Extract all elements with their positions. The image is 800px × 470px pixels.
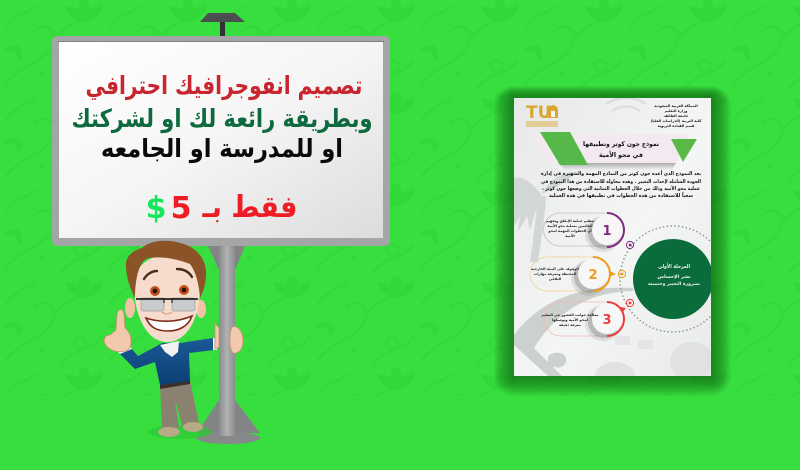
left cuff xyxy=(118,346,132,354)
header institution text: كلية التربية (الدراسات العليا) xyxy=(651,119,702,123)
eyebrows xyxy=(144,269,192,279)
step 3: معالجة جوانب القصور في التعليم xyxy=(541,313,599,317)
step 3: 3 xyxy=(602,313,612,328)
trousers xyxy=(160,381,199,428)
sweeping curve xyxy=(514,288,633,376)
price text: فقط بـ xyxy=(202,190,298,225)
shirt collar xyxy=(160,341,179,357)
price number: 5 xyxy=(171,191,191,226)
watermark music note xyxy=(548,352,566,368)
dollar sign: $ xyxy=(146,191,166,226)
palm silhouette xyxy=(514,172,575,262)
watermark flowchart xyxy=(615,336,653,349)
ears xyxy=(125,298,206,318)
header institution text: قسم القيادة التربوية xyxy=(658,124,695,128)
step 1: الأمية xyxy=(565,233,575,238)
stage circle xyxy=(633,239,713,319)
step 3: معرفة دقيقة xyxy=(559,323,581,327)
step 1: تنظيم عملية الإنفاق وتفهيم xyxy=(546,219,595,223)
intro paragraph: سعياً للاستفادة من هذه الخطوات في تطبيقها في هذه العملية xyxy=(549,191,693,199)
step 2: 2 xyxy=(588,268,598,283)
nose xyxy=(162,312,172,314)
step 1: 1 xyxy=(602,224,612,239)
title banner: نموذج جون كوتر وتطبيقها xyxy=(583,140,659,148)
eyes xyxy=(150,285,189,296)
stage circle: المرحلة الأولى xyxy=(658,262,690,270)
billboard xyxy=(52,36,390,246)
step 2: المحيطة ومعرفة مهارات xyxy=(534,272,576,276)
wifi watermark xyxy=(606,98,646,111)
TU logo xyxy=(526,103,558,127)
pointing hand xyxy=(104,310,131,352)
face xyxy=(134,255,200,342)
step 3 xyxy=(541,299,634,341)
header institution text: جامعة الطائف xyxy=(664,114,689,118)
header institution text xyxy=(651,104,702,128)
title banner: في محو الأمية xyxy=(599,150,643,159)
belt xyxy=(160,380,190,389)
hand on post xyxy=(215,323,243,353)
intro paragraph: يعد النموذج الذي أعده جون كوتر من النماذج المهمة والشهيرة في إدارة xyxy=(541,170,701,177)
cartoon man xyxy=(104,241,243,437)
intro paragraph: الجودة الشاملة لإحداث التغيير . وهذه محاولة للاستفادة من هذا النموذج في xyxy=(541,179,701,185)
hair xyxy=(126,241,206,298)
step 2 xyxy=(530,257,626,296)
step 1 xyxy=(544,213,634,252)
step 3: لمحو الأمية وتوصيلها xyxy=(552,317,589,322)
header institution text: المملكة العربية السعودية xyxy=(654,104,698,108)
header institution text: وزارة التعليم xyxy=(665,109,687,113)
intro paragraph xyxy=(541,170,701,199)
shoes xyxy=(158,422,203,437)
title banner xyxy=(530,132,697,170)
sweater and arms xyxy=(119,338,214,385)
floor shadow under man xyxy=(148,425,212,439)
stage circle: بضرورة التغيير وحتميته xyxy=(648,281,700,287)
TU logo: TU xyxy=(526,103,551,123)
step 2: الوقوف على البيئة الخارجية xyxy=(531,267,579,271)
glasses xyxy=(136,298,198,311)
headline line 1: تصميم انفوجرافيك احترافي xyxy=(86,71,362,101)
dotted ring xyxy=(619,225,711,333)
billboard post xyxy=(196,246,260,444)
step 1: أن الخطوات المهمة لمحو xyxy=(547,228,592,233)
right cuff xyxy=(213,338,217,350)
lamp on top of billboard xyxy=(200,13,245,37)
stage circle: نشر الإحساس xyxy=(657,274,691,280)
headline line 3: او للمدرسة او الجامعه xyxy=(101,134,343,164)
headline line 2: وبطريقة رائعة لك او لشركتك xyxy=(72,104,372,134)
poster shadow xyxy=(494,86,731,396)
step 1: القائمين بعملية محو الأمية xyxy=(547,223,593,228)
infographic poster xyxy=(514,98,711,376)
smile xyxy=(146,316,192,331)
watermark circles xyxy=(595,342,711,376)
step 2: التلاقي xyxy=(549,277,561,281)
intro paragraph: عملية محو الأمية وذلك من خلال الخطوات الثمانية التي وضعها جون كوتر ، xyxy=(542,185,700,192)
